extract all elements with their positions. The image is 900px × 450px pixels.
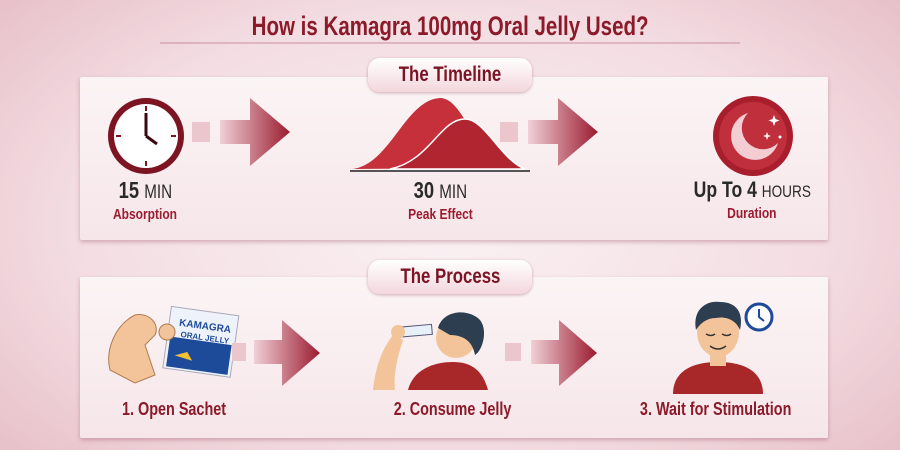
arrow 3: [232, 320, 320, 386]
icon: man drinking jelly: [373, 312, 488, 390]
icon: moon: [713, 96, 793, 176]
icon: hand with sachet: KAMAGRA: [178, 318, 232, 336]
text: 15 min: Absorption: [113, 206, 177, 223]
title: [160, 9, 740, 44]
arrow 1: [192, 98, 290, 166]
label: step 1: 1. Open Sachet: [122, 399, 226, 419]
heading: the process: The Process: [400, 265, 500, 288]
label: step 2: 2. Consume Jelly: [394, 399, 512, 419]
heading: the timeline: [368, 58, 532, 92]
chart: peak effect mountain: [350, 98, 530, 172]
text: 30 min: 30 MIN: [413, 177, 467, 203]
text: up to 4 hours: [693, 177, 811, 222]
icon: clock: [108, 98, 184, 174]
text: 15 min: [113, 177, 177, 223]
text: 30 min: Peak Effect: [408, 206, 472, 223]
text: 30 min: [408, 177, 473, 223]
heading: the process: [368, 260, 532, 294]
panel: timeline: [80, 77, 828, 240]
arrow 4: [505, 320, 597, 386]
text: up to 4 hours: Duration: [727, 205, 777, 222]
panel: process: [80, 277, 828, 438]
icon: hand with sachet: [108, 306, 240, 384]
arrow 2: [500, 98, 598, 166]
label: step 3: 3. Wait for Stimulation: [640, 399, 792, 419]
text: up to 4 hours: Up To 4 HOURS: [693, 177, 811, 202]
title: How is Kamagra 100mg Oral Jelly Used?: [252, 11, 648, 41]
icon: man waiting with clock: [673, 302, 774, 394]
heading: the timeline: The Timeline: [399, 63, 501, 86]
text: 15 min: 15 MIN: [118, 177, 172, 203]
icon: hand with sachet: ORAL JELLY: [180, 330, 230, 346]
